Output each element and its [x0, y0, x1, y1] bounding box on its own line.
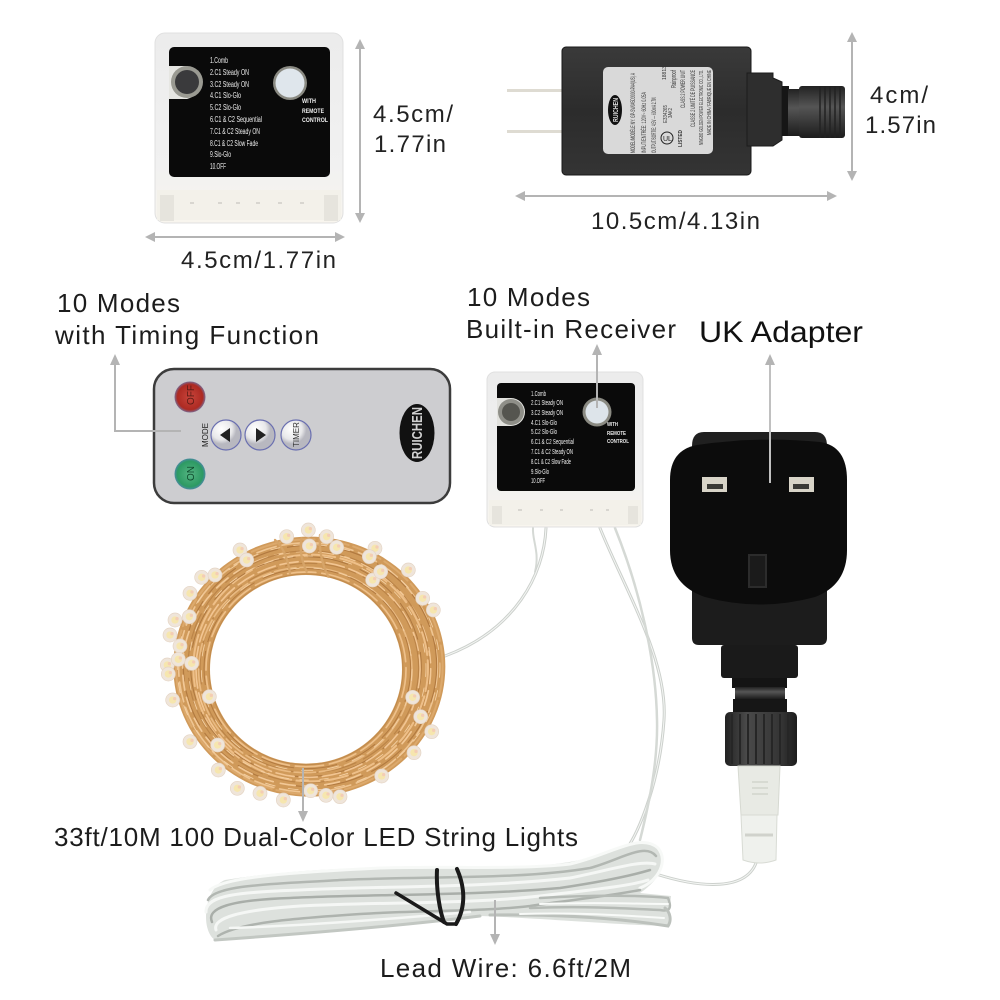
- remote control note: [607, 422, 629, 445]
- power supply label text: INPUT/ENTRÉE: 120V~ 60Hz 0.05A: [641, 92, 648, 153]
- panel: power supply: [507, 47, 845, 175]
- remote control note: WITH: [302, 99, 316, 105]
- receiver modes list: 9.Slo-Glo: [531, 469, 549, 476]
- slot: [749, 555, 766, 587]
- receiver modes list: 4.C1 Slo-Glo: [210, 91, 241, 100]
- heading: remote modes: 10 Modes: [57, 288, 180, 318]
- power pins: [702, 477, 814, 492]
- receiver modes list: 6.C1 & C2 Sequential: [531, 439, 574, 446]
- power supply label text: Rainproof: [671, 70, 678, 88]
- power supply logo: RUICHEN: [613, 98, 620, 122]
- receiver modes list: 3.C2 Steady ON: [210, 80, 249, 89]
- remote control note: [302, 99, 328, 124]
- remote control note: REMOTE: [607, 431, 627, 437]
- UL mark: [661, 132, 673, 144]
- dimension label: receiver height: [373, 101, 453, 158]
- arrow: UK adapter: [765, 354, 775, 483]
- dimension label: power supply height: 1.57in: [865, 112, 936, 139]
- power supply label text: CLASSE 2 UNITÉ DE PUISSANCE: [690, 70, 697, 127]
- receiver modes list: 9.Slo-Glo: [210, 150, 231, 159]
- LED copper coil: [160, 523, 445, 807]
- remote control note: CONTROL: [607, 439, 629, 445]
- receiver modes list: 7.C1 & C2 Steady ON: [531, 449, 573, 456]
- lead wire bundle: [206, 842, 671, 940]
- dimension label: receiver height: 4.5cm/: [373, 101, 453, 128]
- power supply label text: OUTPUT/SORTIE: 4.5V --- 600mA 2.7W: [652, 97, 658, 153]
- receiver modes list: 6.C1 & C2 Sequential: [210, 115, 262, 124]
- left arrow button: [211, 420, 241, 450]
- dimension label: receiver height: 1.77in: [374, 131, 446, 158]
- dimension label: receiver width: 4.5cm/1.77in: [181, 247, 336, 274]
- OFF button: OFF: [186, 385, 197, 405]
- power supply label text: [630, 66, 713, 153]
- power supply label text: MODEL/MODÈLE NY: GP-SW045D3000-PA4(US) A: [630, 73, 637, 153]
- panel: remote control: [154, 369, 450, 503]
- heading: receiver modes: Built-in Receiver: [466, 314, 676, 344]
- ON button: ON: [186, 466, 197, 481]
- arrow: remote label: [110, 354, 181, 431]
- power supply label text: 3AK2: [668, 108, 674, 118]
- dimension arrows: top receiver height: [355, 39, 365, 223]
- heading: receiver modes: [466, 282, 676, 344]
- receiver modes list: 8.C1 & C2 Slow Fade: [531, 459, 571, 466]
- dimension label: power supply width: 10.5cm/4.13in: [591, 208, 760, 235]
- receiver modes list: 7.C1 & C2 Steady ON: [210, 127, 260, 136]
- receiver modes list: 1.Comb: [531, 391, 546, 398]
- heading: remote modes: [54, 288, 319, 350]
- heading: remote modes: with Timing Function: [54, 320, 319, 350]
- label: lead wire: Lead Wire: 6.6ft/2M: [380, 953, 631, 983]
- remote control note: REMOTE: [302, 109, 324, 115]
- heading: receiver modes: 10 Modes: [467, 282, 590, 312]
- power supply label text: 18813: [662, 66, 668, 80]
- black twist tie: [396, 869, 463, 924]
- dimension label: power supply height: 4cm/: [870, 82, 928, 109]
- right arrow button: [245, 420, 275, 450]
- UL mark: UL: [663, 136, 672, 143]
- arrow: built-in receiver: [592, 344, 602, 408]
- receiver modes list: 3.C2 Steady ON: [531, 410, 563, 417]
- LED bulbs: [160, 523, 440, 807]
- ON button: [174, 458, 206, 490]
- power supply logo: [608, 95, 622, 125]
- dimension arrows: power supply width: [515, 191, 837, 201]
- receiver modes list: 10.OFF: [210, 162, 226, 171]
- power supply label text: MADE IN CHINA / FABRIQUÉ EN CHINE: [706, 70, 713, 135]
- receiver modes list: 4.C1 Slo-Glo: [531, 420, 557, 427]
- timer button: [281, 420, 311, 450]
- receiver modes list: 10.OFF: [531, 478, 545, 485]
- panel: UK adapter: [670, 432, 847, 863]
- remote control note: CONTROL: [302, 118, 328, 124]
- receiver modes list: 2.C1 Steady ON: [531, 400, 563, 407]
- arrow: string lights: [298, 768, 308, 822]
- timer button: TIMER: [292, 422, 301, 447]
- receiver modes list: 8.C1 & C2 Slow Fade: [210, 139, 258, 148]
- receiver modes list: 5.C2 Slo-Glo: [531, 429, 557, 436]
- mode label: MODE: [201, 423, 210, 447]
- clear wires: [445, 528, 757, 884]
- logo: [400, 404, 434, 462]
- remote control note: WITH: [607, 422, 618, 428]
- receiver modes list: 2.C1 Steady ON: [210, 68, 249, 77]
- arrow: lead wire: [490, 900, 500, 945]
- dimension label: power supply height: [865, 82, 936, 139]
- receiver modes list: [210, 56, 262, 171]
- label: string lights: 33ft/10M 100 Dual-Color LED String Lights: [54, 822, 578, 852]
- power supply label text: LISTED: [678, 130, 684, 147]
- dimension arrows: power supply height: [847, 32, 857, 181]
- OFF button: [174, 382, 206, 412]
- power supply label text: NINGBO GOLDEN POWER ELECTRONIC CO., LTD.: [699, 70, 705, 145]
- power supply label text: CLASS 2 POWER UNIT: [681, 70, 687, 108]
- clear connector: [738, 766, 780, 863]
- power supply label text: E334265: [663, 105, 669, 123]
- dimension arrows: top receiver width: [145, 232, 345, 242]
- heading: UK adapter: UK Adapter: [699, 316, 863, 349]
- panel: receiver with wires: [487, 372, 643, 527]
- panel: receiver top view: [155, 33, 343, 223]
- receiver modes list: 5.C2 Slo-Glo: [210, 103, 241, 112]
- receiver modes list: [531, 391, 574, 485]
- receiver modes list: 1.Comb: [210, 56, 228, 65]
- logo: RUICHEN: [409, 407, 426, 459]
